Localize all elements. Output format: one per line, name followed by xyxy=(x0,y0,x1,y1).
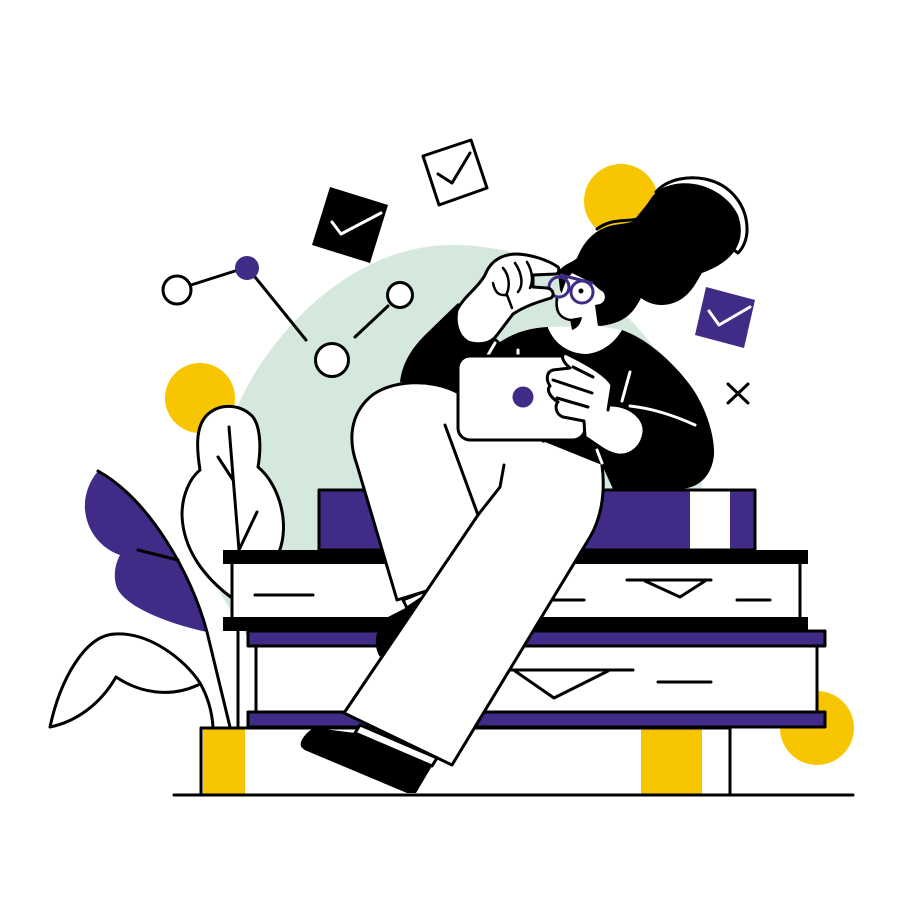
eye xyxy=(578,288,584,294)
hair halo crescent xyxy=(656,178,747,253)
network diagram xyxy=(163,256,412,376)
icon: cross xyxy=(728,384,748,403)
stem xyxy=(98,471,230,727)
lap crease xyxy=(597,450,602,463)
bottom book xyxy=(201,728,730,795)
white upper leaf xyxy=(182,406,283,600)
leg crease xyxy=(445,425,478,515)
icon: black checkbox xyxy=(312,187,388,263)
white book two xyxy=(223,550,808,631)
hair xyxy=(558,183,741,326)
front sock xyxy=(355,725,437,766)
top purple book xyxy=(319,490,755,550)
book stack xyxy=(174,490,853,795)
tablet xyxy=(458,356,585,440)
neckline chest xyxy=(548,326,622,354)
background green circle xyxy=(215,245,702,650)
icon: outlined checkbox xyxy=(423,140,487,205)
ground line xyxy=(174,794,853,796)
plant xyxy=(50,406,283,728)
tablet dot xyxy=(512,386,534,408)
raised hand xyxy=(456,254,559,344)
tablet hand xyxy=(547,353,644,455)
face and neck xyxy=(558,273,605,334)
torso xyxy=(400,303,714,489)
leaf veins xyxy=(218,427,257,550)
white book three xyxy=(248,631,825,727)
icon: purple checkbox xyxy=(695,287,755,348)
back sock xyxy=(403,592,425,608)
yellow circles xyxy=(165,164,854,765)
front leg xyxy=(344,442,603,765)
upper leg xyxy=(352,383,602,600)
purple leaf vein xyxy=(138,550,178,560)
front shoe xyxy=(301,728,432,793)
hair top outline over yellow xyxy=(597,203,650,229)
sleeve highlights xyxy=(488,343,695,425)
glasses xyxy=(549,275,593,303)
white lower leaf xyxy=(50,634,213,727)
person xyxy=(301,178,747,793)
purple leaf xyxy=(85,471,207,632)
back shoe xyxy=(376,598,425,657)
